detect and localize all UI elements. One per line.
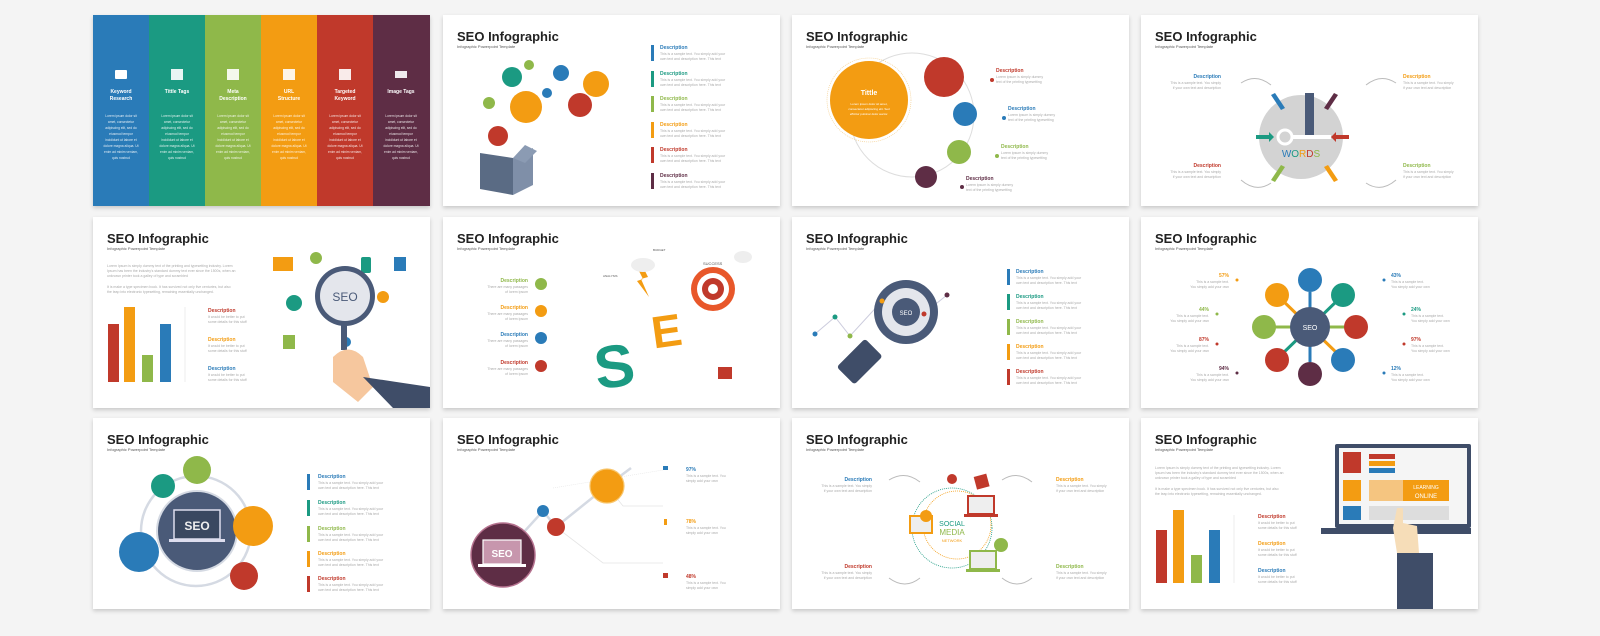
panel: slide 5 magnifier and bar chart: SEO Infographic <box>107 231 209 246</box>
panel: slide 3 title circle: Description <box>1008 106 1036 112</box>
panel: slide 3 title circle: Lorem ipsum is simply dummy <box>996 75 1043 79</box>
panel: slide 5 magnifier and bar chart: some details for this stuff <box>208 320 247 324</box>
panel: slide 4 key words: This is a sample text. You simply <box>1170 170 1221 174</box>
panel: slide 9 SEO laptop cluster: own text and description here. This text <box>318 486 379 490</box>
panel: slide 11 social media network: This is a sample text. You simply <box>1056 571 1107 575</box>
panel: slide 9 SEO laptop cluster: own text and description here. This text <box>318 563 379 567</box>
panel: slide 12 learning online laptop: Description <box>1258 568 1286 574</box>
panel: slide 9 SEO laptop cluster: This is a sample text. You simply add your <box>318 533 384 537</box>
panel: slide 4 key words: Description <box>1403 74 1431 80</box>
panel: slide 12 learning online laptop: It is make a type specimen book. It has survived not only five centuries, but also <box>1155 487 1279 491</box>
panel: slide 4 key words: This is a sample text. You simply <box>1403 170 1454 174</box>
panel: slide 6 SEO letters: BUDGET <box>653 248 666 252</box>
panel: slide 6 SEO letters: of lorem ipsum <box>505 317 528 321</box>
panel: slide 10 growth path: 78% <box>686 519 697 525</box>
panel: slide 1 color columns: amet, consectetur <box>388 120 415 124</box>
panel: slide 10 growth path: SEO Infographic <box>457 432 559 447</box>
panel: slide 1 color columns: quis nostrud <box>392 156 410 160</box>
panel: slide 4 key words: Description <box>1193 163 1221 169</box>
panel: slide 8 SEO hub: This is a sample text. <box>1391 373 1424 377</box>
panel: slide 9 SEO laptop cluster: This is a sample text. You simply add your <box>318 481 384 485</box>
panel: slide 1 color columns: eiusmod tempor <box>109 132 134 136</box>
panel: slide 12 learning online laptop: Ipsum has been the industry's standard dummy text ever since the 1500s, when an <box>1155 471 1284 475</box>
panel: slide 11 social media network: MEDIA <box>939 528 965 537</box>
panel: slide 8 SEO hub: SEO <box>1303 325 1318 332</box>
panel: slide 2 box with icons: This is a sample text. You simply add your <box>660 52 726 56</box>
panel: slide 1 color columns: dolore magna aliqua. Ut <box>103 144 139 148</box>
panel: slide 2 box with icons: Description <box>660 45 688 51</box>
panel: slide 1 color columns: quis nostrud <box>168 156 186 160</box>
panel: slide 1 color columns: Targeted <box>335 89 355 95</box>
panel: slide 1 color columns: eiusmod tempor <box>165 132 190 136</box>
panel: slide 10 growth path <box>443 418 780 609</box>
panel: slide 1 color columns: amet, consectetur <box>276 120 303 124</box>
panel: slide 6 SEO letters: There are many passages <box>487 339 528 343</box>
panel: slide 4 key words: SEO Infographic <box>1155 29 1257 44</box>
panel: slide 7 magnifier line chart: SEO Infographic <box>806 231 908 246</box>
panel: slide 12 learning online laptop: It would be better to put <box>1258 575 1295 579</box>
panel: slide 7 magnifier line chart: SEO <box>900 311 913 317</box>
panel: slide 1 color columns: Structure <box>278 96 300 102</box>
panel: slide 2 box with icons: This is a sample text. You simply add your <box>660 103 726 107</box>
panel: slide 5 magnifier and bar chart: Lorem Ipsum is simply dummy text of the printing and typesetting industry. Lorem <box>107 264 233 268</box>
panel: slide 11 social media network: if your own text and description <box>1056 489 1104 493</box>
panel: slide 5 magnifier and bar chart: some details for this stuff <box>208 378 247 382</box>
panel: slide 4 key words: Description <box>1193 74 1221 80</box>
panel: slide 1 color columns: incididunt ut labore et <box>385 138 417 142</box>
panel: slide 5 magnifier and bar chart: Ipsum has been the industry's standard dummy text ever since the 1500s, when an <box>107 269 236 273</box>
panel: slide 8 SEO hub: You simply add your own <box>1190 378 1229 382</box>
panel: slide 1 color columns: incididunt ut labore et <box>329 138 361 142</box>
panel: slide 1 color columns: adipiscing elit, sed do <box>273 126 305 130</box>
panel: slide 9 SEO laptop cluster <box>93 418 430 609</box>
panel: slide 10 growth path: This is a sample text. You <box>686 526 726 530</box>
panel: slide 8 SEO hub: 24% <box>1411 307 1422 313</box>
panel: slide 3 title circle: Description <box>966 176 994 182</box>
panel: slide 8 SEO hub: 97% <box>1411 337 1422 343</box>
panel: slide 8 SEO hub: This is a sample text. <box>1196 373 1229 377</box>
panel: slide 5 magnifier and bar chart: some details for this stuff <box>208 349 247 353</box>
panel: slide 6 SEO letters: SUCCESS <box>703 261 723 266</box>
panel: slide 12 learning online laptop: LEARNING <box>1413 485 1439 491</box>
panel: slide 11 social media network: Infographic Powerpoint Template <box>806 447 865 452</box>
panel: slide 12 learning online laptop: some details for this stuff <box>1258 553 1297 557</box>
panel: slide 1 color columns: eiusmod tempor <box>221 132 246 136</box>
panel: slide 5 magnifier and bar chart <box>93 217 430 408</box>
panel: slide 7 magnifier line chart: own text and description here. This text <box>1016 356 1077 360</box>
panel: slide 11 social media network: This is a sample text. You simply <box>1056 484 1107 488</box>
panel: slide 8 SEO hub: This is a sample text. <box>1176 344 1209 348</box>
panel: slide 9 SEO laptop cluster: Description <box>318 576 346 582</box>
panel: slide 4 key words: if your own text and description <box>1403 86 1451 90</box>
panel: slide 8 SEO hub: You simply add your own <box>1170 319 1209 323</box>
panel: slide 2 box with icons: Description <box>660 96 688 102</box>
panel: slide 2 box with icons: own text and description here. This text <box>660 159 721 163</box>
panel: slide 2 box with icons: This is a sample text. You simply add your <box>660 129 726 133</box>
panel: slide 4 key words <box>1141 15 1478 206</box>
panel: slide 3 title circle: consectetur adipiscing elit. Sed <box>848 107 890 111</box>
panel: slide 12 learning online laptop <box>1141 418 1478 609</box>
panel: slide 1 color columns: eiusmod tempor <box>277 132 302 136</box>
panel: slide 8 SEO hub: This is a sample text. <box>1411 314 1444 318</box>
panel: slide 6 SEO letters: Infographic Powerpoint Template <box>457 246 516 251</box>
panel: slide 4 key words: Infographic Powerpoint Template <box>1155 44 1214 49</box>
panel: slide 7 magnifier line chart <box>792 217 1129 408</box>
panel: slide 2 box with icons: own text and description here. This text <box>660 83 721 87</box>
panel: slide 5 magnifier and bar chart: Infographic Powerpoint Template <box>107 246 166 251</box>
panel: slide 11 social media network: Description <box>844 477 872 483</box>
panel: slide 9 SEO laptop cluster: own text and description here. This text <box>318 588 379 592</box>
panel: slide 2 box with icons: This is a sample text. You simply add your <box>660 78 726 82</box>
panel: slide 3 title circle: efficitur pulvinar dolor auctor. <box>850 112 888 116</box>
panel: slide 9 SEO laptop cluster: This is a sample text. You simply add your <box>318 558 384 562</box>
panel: slide 1 color columns: Lorem ipsum dolor sit <box>273 114 305 118</box>
panel: slide 3 title circle: SEO Infographic <box>806 29 908 44</box>
panel: slide 1 color columns: enim ad minim veniam, <box>384 150 418 154</box>
panel: slide 9 SEO laptop cluster: SEO <box>184 519 210 533</box>
panel: slide 6 SEO letters: There are many passages <box>487 312 528 316</box>
panel: slide 1 color columns: quis nostrud <box>112 156 130 160</box>
panel: slide 1 color columns: dolore magna aliqua. Ut <box>327 144 363 148</box>
panel: slide 9 SEO laptop cluster: Infographic Powerpoint Template <box>107 447 166 452</box>
panel: slide 8 SEO hub: 87% <box>1199 337 1210 343</box>
panel: slide 6 SEO letters: Description <box>500 278 528 284</box>
panel: slide 6 SEO letters: E <box>648 304 685 358</box>
panel: slide 7 magnifier line chart: This is a sample text. You simply add your <box>1016 351 1082 355</box>
panel: slide 12 learning online laptop: SEO Infographic <box>1155 432 1257 447</box>
panel: slide 1 color columns: quis nostrud <box>224 156 242 160</box>
panel: slide 6 SEO letters: There are many passages <box>487 285 528 289</box>
panel: slide 8 SEO hub: Infographic Powerpoint Template <box>1155 246 1214 251</box>
panel: slide 11 social media network: This is a sample text. You simply <box>821 484 872 488</box>
panel: slide 1 color columns: eiusmod tempor <box>389 132 414 136</box>
panel: slide 3 title circle: Description <box>996 68 1024 74</box>
panel: slide 7 magnifier line chart: Description <box>1016 344 1044 350</box>
panel: slide 6 SEO letters: SEO Infographic <box>457 231 559 246</box>
panel: slide 12 learning online laptop: some details for this stuff <box>1258 580 1297 584</box>
panel: slide 7 magnifier line chart: Infographic Powerpoint Template <box>806 246 865 251</box>
panel: slide 8 SEO hub: This is a sample text. <box>1176 314 1209 318</box>
panel: slide 7 magnifier line chart: This is a sample text. You simply add your <box>1016 376 1082 380</box>
panel: slide 7 magnifier line chart: Description <box>1016 369 1044 375</box>
panel: slide 3 title circle: Infographic Powerpoint Template <box>806 44 865 49</box>
panel: slide 2 box with icons: SEO Infographic <box>457 29 559 44</box>
panel: slide 1 color columns: Tittle Tags <box>165 89 189 95</box>
panel: slide 7 magnifier line chart: This is a sample text. You simply add your <box>1016 301 1082 305</box>
panel: slide 1 color columns: Image Tags <box>387 89 415 95</box>
panel: slide 8 SEO hub: This is a sample text. <box>1196 280 1229 284</box>
panel: slide 2 box with icons: own text and description here. This text <box>660 185 721 189</box>
panel: slide 3 title circle: Description <box>1001 144 1029 150</box>
panel: slide 8 SEO hub: 94% <box>1219 366 1230 372</box>
panel: slide 3 title circle: text of the printing typesetting <box>966 188 1012 192</box>
panel: slide 3 title circle: Tittle <box>861 90 877 97</box>
panel: slide 12 learning online laptop: It would be better to put <box>1258 548 1295 552</box>
panel: slide 1 color columns: Meta <box>227 89 239 95</box>
panel: slide 8 SEO hub: You simply add your own <box>1411 349 1450 353</box>
panel: slide 5 magnifier and bar chart: Description <box>208 337 236 343</box>
panel: slide 7 magnifier line chart: This is a sample text. You simply add your <box>1016 326 1082 330</box>
panel: slide 12 learning online laptop: Lorem Ipsum is simply dummy text of the printing and typesetting industry. Lorem <box>1155 466 1281 470</box>
panel: slide 6 SEO letters: of lorem ipsum <box>505 344 528 348</box>
panel: slide 6 SEO letters: Description <box>500 305 528 311</box>
panel: slide 11 social media network: if your own text and description <box>1056 576 1104 580</box>
panel: slide 4 key words: This is a sample text. You simply <box>1170 81 1221 85</box>
panel: slide 12 learning online laptop: unknown printer took a galley of type and scrambled <box>1155 476 1236 480</box>
panel: slide 9 SEO laptop cluster: own text and description here. This text <box>318 512 379 516</box>
panel: slide 1 color columns: enim ad minim veniam, <box>328 150 362 154</box>
panel: slide 11 social media network: SEO Infographic <box>806 432 908 447</box>
panel: slide 5 magnifier and bar chart: It is make a type specimen book. It has survived not only five centuries, but also <box>107 285 231 289</box>
panel: slide 3 title circle: text of the printing typesetting <box>996 80 1042 84</box>
panel: slide 5 magnifier and bar chart: Description <box>208 308 236 314</box>
panel: slide 12 learning online laptop: Description <box>1258 514 1286 520</box>
panel: slide 8 SEO hub: You simply add your own <box>1391 285 1430 289</box>
panel: slide 5 magnifier and bar chart: SEO <box>332 290 358 304</box>
panel: slide 5 magnifier and bar chart: It would be better to put <box>208 373 245 377</box>
panel: slide 8 SEO hub: 12% <box>1391 366 1402 372</box>
panel: slide 8 SEO hub: 57% <box>1219 273 1230 279</box>
panel: slide 8 SEO hub: SEO Infographic <box>1155 231 1257 246</box>
panel: slide 4 key words: if your own text and description <box>1173 175 1221 179</box>
panel: slide 1 color columns: amet, consectetur <box>164 120 191 124</box>
panel: slide 11 social media network: NETWORK <box>942 538 963 543</box>
panel: slide 7 magnifier line chart: own text and description here. This text <box>1016 281 1077 285</box>
panel: slide 9 SEO laptop cluster: This is a sample text. You simply add your <box>318 507 384 511</box>
panel: slide 10 growth path: simply add your own <box>686 531 718 535</box>
panel: slide 11 social media network: if your own text and description <box>824 489 872 493</box>
panel: slide 8 SEO hub <box>1141 217 1478 408</box>
panel: slide 6 SEO letters: of lorem ipsum <box>505 290 528 294</box>
panel: slide 1 color columns: quis nostrud <box>336 156 354 160</box>
panel: slide 11 social media network: This is a sample text. You simply <box>821 571 872 575</box>
panel: slide 7 magnifier line chart: own text and description here. This text <box>1016 306 1077 310</box>
panel: slide 12 learning online laptop: some details for this stuff <box>1258 526 1297 530</box>
panel: slide 2 box with icons: own text and description here. This text <box>660 57 721 61</box>
panel: slide 1 color columns: incididunt ut labore et <box>161 138 193 142</box>
panel: slide 5 magnifier and bar chart: It would be better to put <box>208 344 245 348</box>
panel: slide 9 SEO laptop cluster: SEO Infographic <box>107 432 209 447</box>
panel: slide 1 color columns: dolore magna aliqua. Ut <box>271 144 307 148</box>
panel: slide 10 growth path: This is a sample text. You <box>686 581 726 585</box>
panel: slide 3 title circle: Lorem ipsum is simply dummy <box>1008 113 1055 117</box>
panel: slide 7 magnifier line chart: Description <box>1016 294 1044 300</box>
panel: slide 10 growth path: This is a sample text. You <box>686 474 726 478</box>
panel: slide 9 SEO laptop cluster: Description <box>318 500 346 506</box>
panel: slide 10 growth path: 48% <box>686 574 697 580</box>
panel: slide 10 growth path: Infographic Powerpoint Template <box>457 447 516 452</box>
panel: slide 1 color columns: Keyword <box>334 96 356 102</box>
panel: slide 8 SEO hub: You simply add your own <box>1391 378 1430 382</box>
panel: slide 1 color columns: adipiscing elit, sed do <box>217 126 249 130</box>
panel: slide 1 color columns: Lorem ipsum dolor sit <box>329 114 361 118</box>
panel: slide 12 learning online laptop: the leap into electronic typesetting, remaining essentially unchanged. <box>1155 492 1262 496</box>
panel: slide 1 color columns: Research <box>110 96 132 102</box>
panel: slide 12 learning online laptop: Description <box>1258 541 1286 547</box>
panel: slide 2 box with icons: own text and description here. This text <box>660 134 721 138</box>
panel: slide 12 learning online laptop: Infographic Powerpoint Template <box>1155 447 1214 452</box>
panel: slide 5 magnifier and bar chart: unknown printer took a galley of type and scrambled <box>107 274 188 278</box>
panel: slide 10 growth path: simply add your own <box>686 586 718 590</box>
panel: slide 1 color columns: amet, consectetur <box>108 120 135 124</box>
panel: slide 1 color columns: dolore magna aliqua. Ut <box>159 144 195 148</box>
panel: slide 8 SEO hub: You simply add your own <box>1411 319 1450 323</box>
panel: slide 1 color columns: Lorem ipsum dolor sit <box>385 114 417 118</box>
panel: slide 1 color columns: incididunt ut labore et <box>273 138 305 142</box>
panel: slide 1 color columns: dolore magna aliqua. Ut <box>383 144 419 148</box>
panel: slide 9 SEO laptop cluster: own text and description here. This text <box>318 538 379 542</box>
panel: slide 2 box with icons: Description <box>660 122 688 128</box>
panel: slide 2 box with icons: Description <box>660 147 688 153</box>
panel: slide 6 SEO letters: There are many passages <box>487 367 528 371</box>
panel: slide 6 SEO letters: Description <box>500 360 528 366</box>
panel: slide 6 SEO letters: ANALYSIS <box>603 274 617 278</box>
panel: slide 2 box with icons: Description <box>660 71 688 77</box>
panel: slide 1 color columns: adipiscing elit, sed do <box>329 126 361 130</box>
panel: slide 8 SEO hub: You simply add your own <box>1170 349 1209 353</box>
panel: slide 2 box with icons: own text and description here. This text <box>660 108 721 112</box>
panel: slide 2 box with icons <box>443 15 780 206</box>
panel: slide 7 magnifier line chart: Description <box>1016 269 1044 275</box>
panel: slide 4 key words: if your own text and description <box>1173 86 1221 90</box>
panel: slide 2 box with icons: Description <box>660 173 688 179</box>
panel: slide 1 color columns: Lorem ipsum dolor sit <box>105 114 137 118</box>
panel: slide 11 social media network <box>792 418 1129 609</box>
panel: slide 8 SEO hub: 44% <box>1199 307 1210 313</box>
panel: slide 10 growth path: 97% <box>686 467 697 473</box>
panel: slide 11 social media network: Description <box>1056 477 1084 483</box>
panel: slide 2 box with icons: This is a sample text. You simply add your <box>660 180 726 184</box>
panel: slide 7 magnifier line chart: own text and description here. This text <box>1016 381 1077 385</box>
panel: slide 4 key words: This is a sample text. You simply <box>1403 81 1454 85</box>
panel: slide 1 color columns: Lorem ipsum dolor sit <box>161 114 193 118</box>
panel: slide 1 color columns: Description <box>219 96 247 102</box>
panel: slide 1 color columns: amet, consectetur <box>332 120 359 124</box>
panel: slide 12 learning online laptop: ONLINE <box>1415 494 1437 500</box>
panel: slide 5 magnifier and bar chart: It would be better to put <box>208 315 245 319</box>
panel: slide 2 box with icons: This is a sample text. You simply add your <box>660 154 726 158</box>
panel: slide 9 SEO laptop cluster: Description <box>318 474 346 480</box>
panel: slide 8 SEO hub: This is a sample text. <box>1411 344 1444 348</box>
panel: slide 7 magnifier line chart: own text and description here. This text <box>1016 331 1077 335</box>
panel: slide 1 color columns: enim ad minim veniam, <box>216 150 250 154</box>
panel: slide 3 title circle: text of the printing typesetting <box>1001 156 1047 160</box>
panel: slide 5 magnifier and bar chart: Description <box>208 366 236 372</box>
panel: slide 11 social media network: SOCIAL <box>939 521 965 528</box>
panel: slide 1 color columns: Keyword <box>110 89 132 95</box>
panel: slide 3 title circle: Lorem ipsum dolor sit amet, <box>850 102 888 106</box>
panel: slide 1 color columns: enim ad minim veniam, <box>104 150 138 154</box>
panel: slide 10 growth path: simply add your own <box>686 479 718 483</box>
panel: slide 5 magnifier and bar chart: the leap into electronic typesetting, remaining essentially unchanged. <box>107 290 214 294</box>
panel: slide 1 color columns: adipiscing elit, sed do <box>385 126 417 130</box>
panel: slide 3 title circle: text of the printing typesetting <box>1008 118 1054 122</box>
panel: slide 3 title circle: Lorem ipsum is simply dummy <box>966 183 1013 187</box>
panel: slide 1 color columns: amet, consectetur <box>220 120 247 124</box>
panel: slide 8 SEO hub: This is a sample text. <box>1391 280 1424 284</box>
panel: slide 6 SEO letters <box>443 217 780 408</box>
panel: slide 1 color columns: incididunt ut labore et <box>105 138 137 142</box>
panel: slide 1 color columns: eiusmod tempor <box>333 132 358 136</box>
panel: slide 1 color columns: adipiscing elit, sed do <box>161 126 193 130</box>
panel: slide 4 key words: WORDS <box>1282 149 1321 160</box>
panel: slide 6 SEO letters: S <box>590 330 639 402</box>
panel: slide 9 SEO laptop cluster: Description <box>318 526 346 532</box>
panel: slide 1 color columns <box>93 15 430 206</box>
panel: slide 9 SEO laptop cluster: Description <box>318 551 346 557</box>
panel: slide 11 social media network: Description <box>844 564 872 570</box>
panel: slide 11 social media network: Description <box>1056 564 1084 570</box>
panel: slide 6 SEO letters: of lorem ipsum <box>505 372 528 376</box>
panel: slide 1 color columns: URL <box>284 89 294 95</box>
panel: slide 3 title circle: Lorem ipsum is simply dummy <box>1001 151 1048 155</box>
panel: slide 7 magnifier line chart: This is a sample text. You simply add your <box>1016 276 1082 280</box>
panel: slide 10 growth path: SEO <box>491 549 513 560</box>
panel: slide 1 color columns: enim ad minim veniam, <box>160 150 194 154</box>
panel: slide 1 color columns: quis nostrud <box>280 156 298 160</box>
panel: slide 6 SEO letters: Description <box>500 332 528 338</box>
panel: slide 4 key words: Description <box>1403 163 1431 169</box>
panel: slide 7 magnifier line chart: Description <box>1016 319 1044 325</box>
panel: slide 1 color columns: adipiscing elit, sed do <box>105 126 137 130</box>
panel: slide 1 color columns: enim ad minim veniam, <box>272 150 306 154</box>
panel: slide 1 color columns: dolore magna aliqua. Ut <box>215 144 251 148</box>
panel: slide 8 SEO hub: 43% <box>1391 273 1402 279</box>
panel: slide 4 key words: if your own text and description <box>1403 175 1451 179</box>
panel: slide 8 SEO hub: You simply add your own <box>1190 285 1229 289</box>
panel: slide 3 title circle <box>792 15 1129 206</box>
panel: slide 9 SEO laptop cluster: This is a sample text. You simply add your <box>318 583 384 587</box>
panel: slide 1 color columns: incididunt ut labore et <box>217 138 249 142</box>
panel: slide 2 box with icons: Infographic Powerpoint Template <box>457 44 516 49</box>
panel: slide 1 color columns: Lorem ipsum dolor sit <box>217 114 249 118</box>
panel: slide 12 learning online laptop: It would be better to put <box>1258 521 1295 525</box>
panel: slide 11 social media network: if your own text and description <box>824 576 872 580</box>
